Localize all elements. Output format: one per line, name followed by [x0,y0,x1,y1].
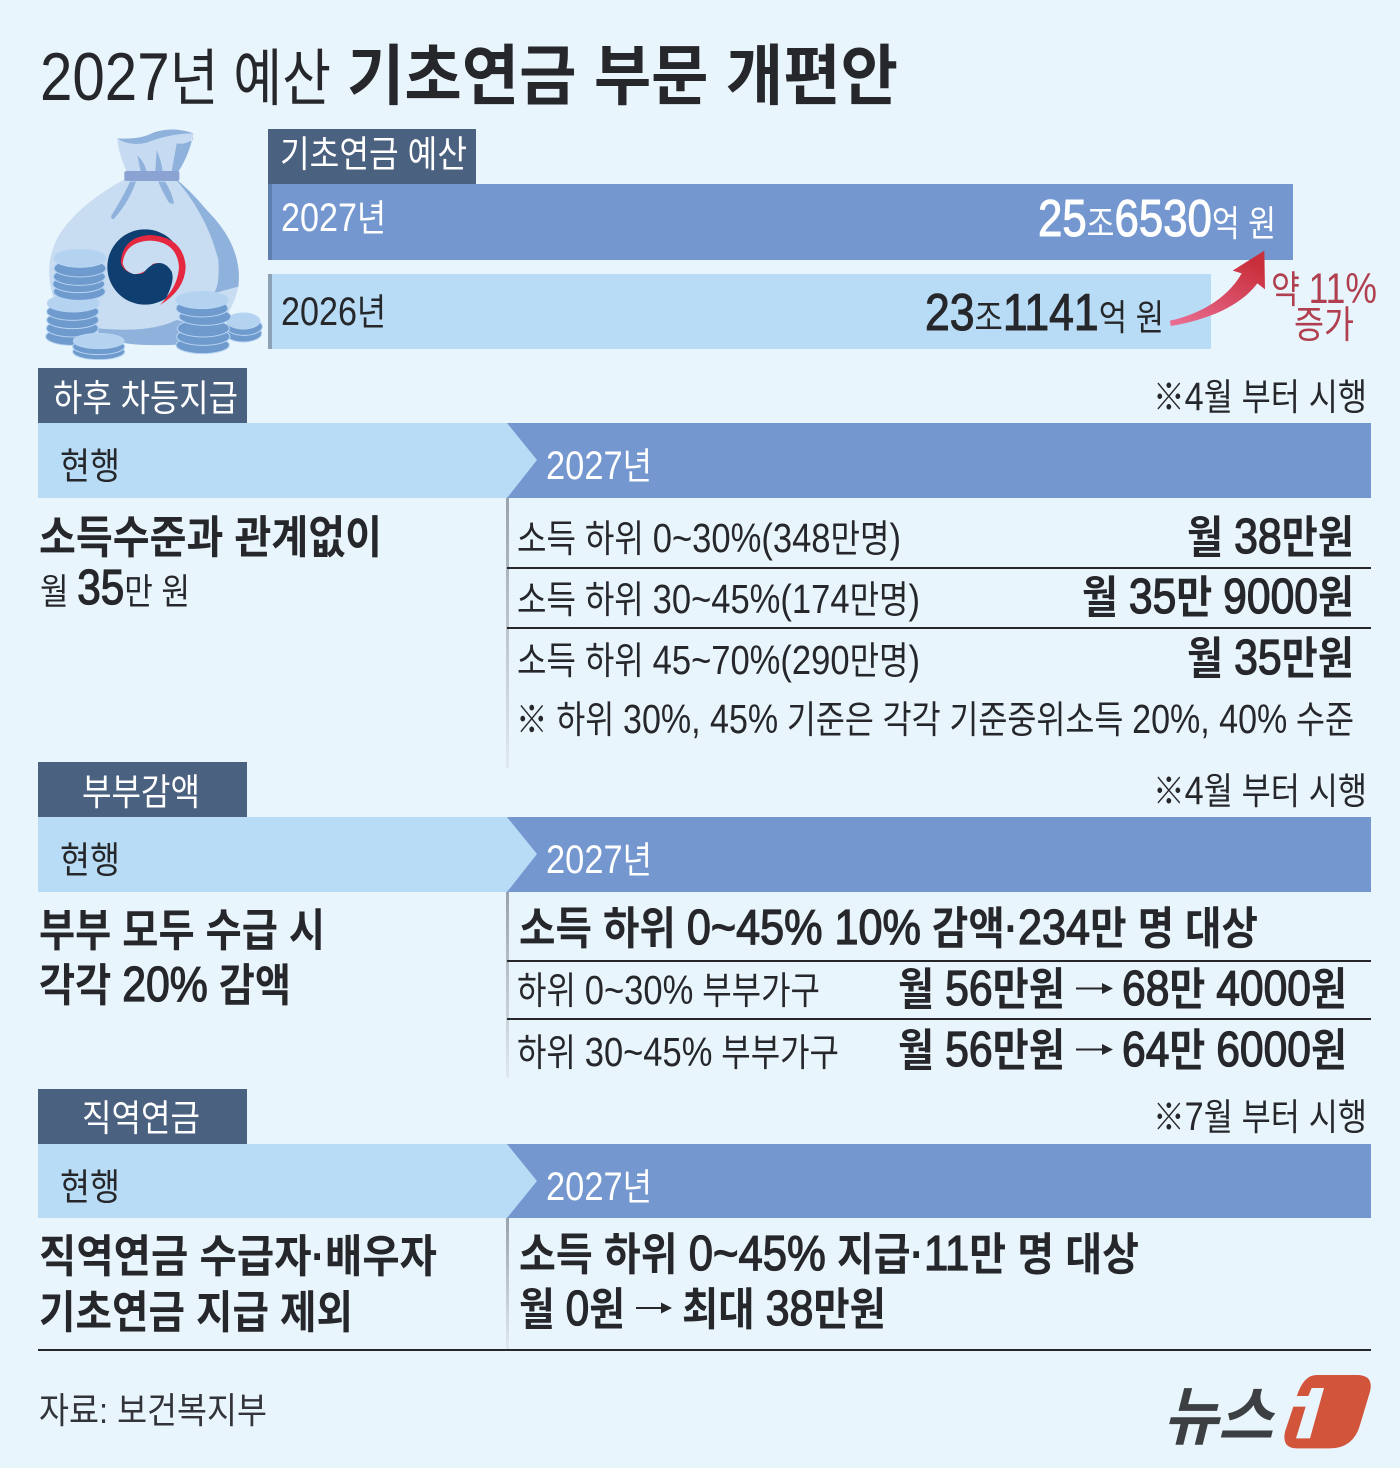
band: 현행 [38,423,537,498]
row: 하위 0~30% 부부가구: 하위 0~30% 부부가구 [517,967,820,1013]
logo: 뉴스1: 뉴스 [1160,1381,1287,1453]
band: 2027년 [507,1144,1371,1218]
text: 현행 내용: 월 35만 원 [40,561,190,615]
row: 소득 하위 30~45% [517,570,1354,624]
icon: money bag with coins [46,129,262,360]
band: 현행: 현행 [60,1167,120,1208]
band: 2027년 [507,817,1371,892]
row: 하위 0~30% 부부가구: 68만 4000원 [1122,962,1347,1016]
text: 현행 내용: 소득수준과 관계없이 [39,512,382,563]
row: 소득 하위 30~45%: 월 35만 9000원 [1082,570,1354,624]
band: 현행 [38,1144,537,1218]
heading: 하후 차등지급: 하후 차등지급 [53,378,238,419]
arrow: increase [1170,251,1265,326]
source: 자료: 보건복지부 [39,1390,267,1431]
text: 현행 내용 [39,905,325,1012]
text: 개편 내용: 소득 하위 0~45% 지급·11만 명 대상 [519,1227,1139,1281]
band: 현행: 현행 [60,840,120,881]
row: 하위 0~30% 부부가구: 월 56만원 [898,962,1065,1016]
bar: 2027 budget: 2027년 [281,196,386,240]
row: 소득 하위 45~70%: 소득 하위 45~70%(290만명) [517,637,920,683]
text: 현행 내용: 기초연금 지급 제외 [39,1287,353,1338]
note: 시행 시기: ※7월 부터 시행 [1153,1095,1367,1139]
bar: 2027 budget [268,184,1293,260]
logo: 뉴스1 [1160,1375,1371,1453]
row: 소득 하위 45~70% [517,631,1354,685]
row: 소득 하위 0~30%: 월 38만원 [1187,510,1354,564]
row: 하위 30~45% 부부가구: 월 56만원 [898,1023,1065,1077]
text: 현행 내용 [39,512,382,615]
heading: 직역연금 [38,1089,247,1144]
text: 개편 내용: 최대 38만원 [682,1282,886,1336]
band: 현행 [38,817,537,892]
text: 개편 내용: 소득 하위 0~45% 10% 감액·234만 명 대상 [519,901,1258,955]
row: 하위 30~45% 부부가구 [517,1023,1347,1077]
text: 현행 내용: 부부 모두 수급 시 [39,905,325,956]
panel: 부부감액 [38,762,1371,1078]
text: 현행 내용: 직역연금 수급자·배우자 [39,1231,437,1282]
bar: 2026 budget: 23조1141억 원 [925,284,1164,342]
heading badge: 기초연금 예산 [268,129,476,184]
callout: 약 11% 증가 [1271,265,1377,347]
arrow [636,1302,672,1314]
title: 기초연금 부문 개편안 [347,39,898,113]
arrow [1076,983,1113,994]
heading: 부부감액 [38,762,247,817]
heading: 직역연금: 직역연금 [82,1098,200,1139]
title [40,39,898,115]
band: 2027년: 2027년 [546,444,652,488]
band: 2027년 [507,423,1371,498]
text: 개편 내용 [519,1227,1139,1336]
text: 현행 내용: 각각 20% 감액 [39,958,291,1012]
text: 현행 내용 [39,1231,437,1338]
panel: 하후 차등지급 [38,368,1371,768]
arrow [1076,1044,1113,1055]
bar: 2027 budget: 25조6530억 원 [1038,190,1276,248]
note: 시행 시기: ※4월 부터 시행 [1153,769,1367,813]
row: 소득 하위 0~30%: 소득 하위 0~30%(348만명) [517,515,901,561]
row: 소득 하위 30~45%: 소득 하위 30~45%(174만명) [517,576,920,622]
row: 하위 0~30% 부부가구 [517,962,1347,1016]
row: 하위 30~45% 부부가구: 64만 6000원 [1122,1023,1347,1077]
heading: 하후 차등지급 [38,368,247,423]
panel: 직역연금 [38,1089,1371,1350]
row: 소득 하위 45~70%: 월 35만원 [1187,631,1354,685]
heading badge: 기초연금 예산: 기초연금 예산 [280,134,467,175]
note: 시행 시기: ※4월 부터 시행 [1153,375,1367,419]
band: 현행: 현행 [60,446,120,487]
callout: 약 11% 증가: 약 11% [1271,265,1377,313]
callout: 약 11% 증가: 증가 [1294,305,1354,347]
row: 소득 하위 0~30% [517,510,1354,564]
heading: 부부감액: 부부감액 [82,772,200,813]
bar: 2026 budget: 2026년 [281,290,386,334]
footnote: ※ 하위 30%, 45% 기준은 각각 기준중위소득 20%, 40% 수준 [516,696,1354,742]
text: 개편 내용: 월 0원 [519,1282,625,1336]
row: 하위 30~45% 부부가구: 하위 30~45% 부부가구 [517,1029,839,1075]
title: 2027년 예산 [40,39,331,115]
band: 2027년: 2027년 [546,838,652,882]
band: 2027년: 2027년 [546,1165,652,1209]
bar: 2026 budget [268,274,1211,349]
